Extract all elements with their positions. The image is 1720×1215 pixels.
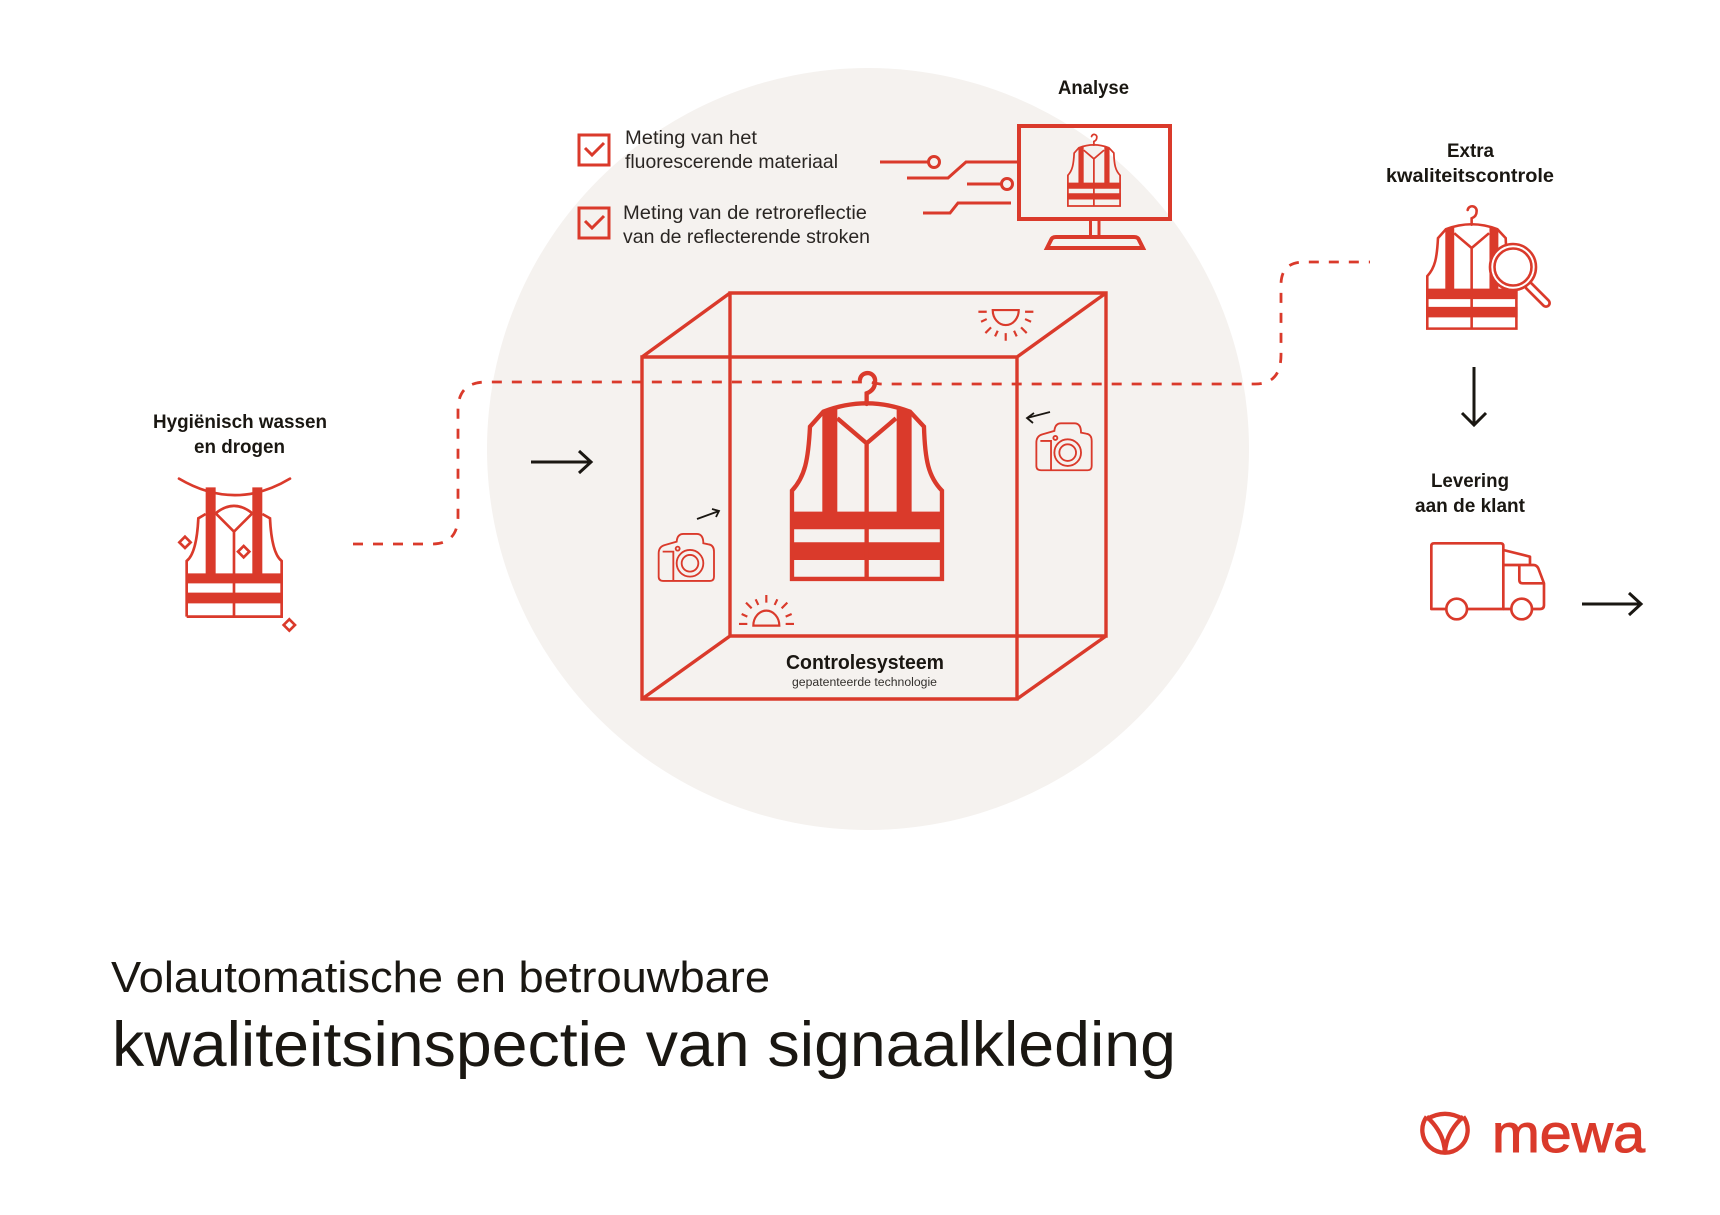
- icon: vest: [1426, 206, 1518, 329]
- checkbox 2: [579, 208, 609, 238]
- step: extra quality control: [1386, 140, 1554, 329]
- text: measurement 2: Meting van de retroreflectie: [623, 202, 867, 224]
- dashed flow line: [353, 262, 1370, 544]
- label: washing: en drogen: [194, 436, 285, 458]
- label: extra control: [1386, 140, 1554, 187]
- icon: monitor with vest: [1019, 126, 1170, 248]
- label: delivery: Levering: [1431, 470, 1509, 492]
- label: control system: Controlesysteem: [786, 652, 944, 674]
- arrow: into control system: [531, 451, 591, 473]
- icon: bottom lamp: [739, 595, 794, 626]
- icon: large vest on hanger: [790, 373, 944, 579]
- sublabel: patented technology: gepatenteerde technologie: [792, 677, 937, 689]
- label: delivery: aan de klant: [1415, 495, 1525, 517]
- label: washing: [153, 411, 327, 458]
- arrow: right camera direction: [1027, 412, 1050, 423]
- label: washing: Hygiënisch wassen: [153, 411, 327, 433]
- circuit lines: [880, 156, 1018, 213]
- logo wordmark: mewa: [1492, 1104, 1646, 1164]
- text: measurement 1: [625, 127, 838, 173]
- label: extra control: kwaliteitscontrole: [1386, 165, 1554, 187]
- icon: magnifier: [1490, 244, 1546, 303]
- wireframe cube: [642, 293, 1106, 699]
- icon: truck: [1431, 543, 1544, 619]
- icon: top lamp: [978, 310, 1033, 341]
- arrow: down to delivery: [1462, 367, 1486, 425]
- label: delivery: [1415, 470, 1525, 517]
- background circle: [487, 68, 1249, 830]
- text: measurement 1: Meting van het: [625, 127, 758, 149]
- title: [111, 953, 1176, 1080]
- step: washing and drying: [153, 411, 327, 631]
- control system box: [642, 293, 1106, 699]
- title: Volautomatische en betrouwbare: [111, 953, 770, 1002]
- logo: mewa: [1422, 1104, 1646, 1164]
- icon: vest on washing line: [179, 479, 295, 631]
- text: measurement 1: fluorescerende materiaal: [625, 151, 838, 173]
- title: kwaliteitsinspectie van signaalkleding: [112, 1010, 1176, 1080]
- icon: right camera: [1036, 423, 1092, 470]
- arrow: left camera direction: [697, 509, 719, 519]
- step: delivery: [1415, 470, 1544, 619]
- arrow: out to customer: [1582, 593, 1641, 615]
- logo icon: [1422, 1114, 1468, 1154]
- label: extra control: Extra: [1447, 140, 1494, 162]
- label: analysis: Analyse: [1058, 77, 1129, 99]
- text: measurement 2: [623, 202, 870, 248]
- text: measurement 2: van de reflecterende stroken: [623, 226, 870, 248]
- measurement checklist: [579, 127, 870, 248]
- icon: left camera: [659, 534, 714, 581]
- checkbox 1: [579, 135, 609, 165]
